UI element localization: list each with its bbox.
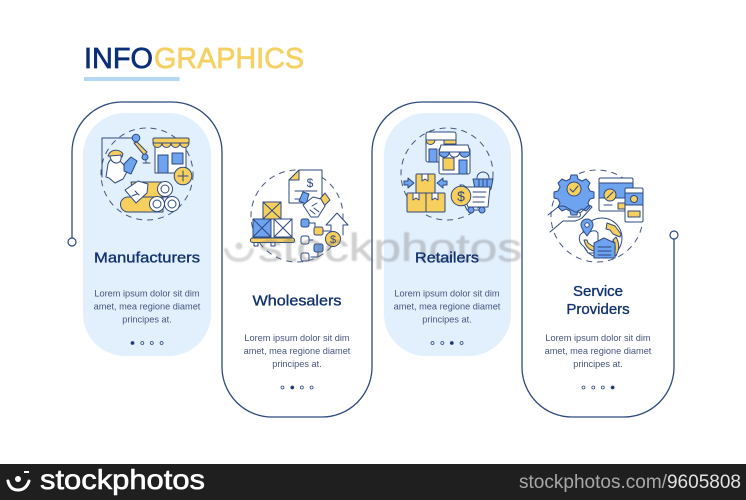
connecting card outline	[68, 102, 678, 417]
footer url: stockphotos.com/9605808	[519, 472, 741, 493]
text: retailers description: amet, mea regione diamet	[394, 302, 501, 312]
title: INFO	[84, 43, 153, 75]
heading: service providers: Service	[573, 283, 623, 300]
pagination: wholesalers	[281, 386, 313, 389]
footer logo: stockphotos	[40, 464, 205, 495]
icon: wholesalers: $	[307, 176, 314, 190]
text: manufacturers description: amet, mea regione diamet	[94, 302, 201, 312]
heading: manufacturers: Manufacturers	[94, 250, 200, 266]
text: service providers description: principes at.	[573, 359, 623, 369]
heading: service providers: Providers	[566, 301, 630, 318]
icon: service providers	[548, 170, 643, 262]
text: manufacturers description: Lorem ipsum dolor sit dim	[94, 288, 200, 298]
title	[84, 43, 304, 81]
pagination: service providers	[582, 386, 614, 389]
panel: retailers background	[384, 113, 511, 356]
watermark: stockphotos	[258, 227, 522, 270]
heading: retailers: Retailers	[415, 250, 479, 266]
pagination: manufacturers	[131, 342, 163, 344]
text: service providers description: Lorem ipsum dolor sit dim	[545, 333, 651, 343]
panel: manufacturers background	[83, 113, 211, 356]
text: manufacturers description: principes at.	[122, 314, 172, 324]
footer bar	[0, 464, 746, 500]
icon: wholesalers	[250, 170, 348, 262]
title: GRAPHICS	[154, 43, 304, 75]
heading: wholesalers: Wholesalers	[252, 292, 342, 310]
text: retailers description: Lorem ipsum dolor sit dim	[394, 288, 500, 298]
text: wholesalers description: amet, mea regione diamet	[244, 346, 351, 356]
text: wholesalers description: Lorem ipsum dolor sit dim	[244, 333, 350, 343]
pagination: retailers	[431, 342, 463, 344]
icon: manufacturers	[101, 128, 193, 220]
text: retailers description: principes at.	[422, 314, 472, 324]
icon: retailers	[401, 128, 493, 220]
text: wholesalers description: principes at.	[272, 359, 322, 369]
icon: retailers: $	[457, 188, 465, 204]
icon: wholesalers: $	[330, 234, 336, 246]
text: service providers description: amet, mea regione diamet	[545, 346, 652, 356]
